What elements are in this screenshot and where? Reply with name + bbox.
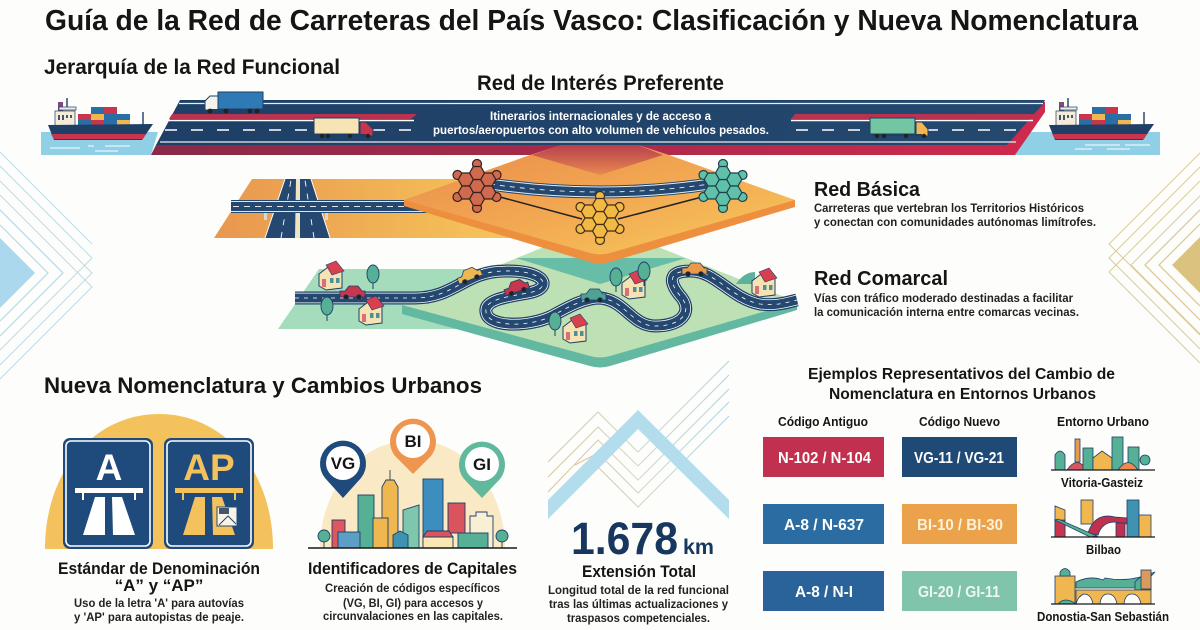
column headers: Código Antiguo [778, 414, 868, 429]
description: Longitud total de la red funcional [548, 585, 729, 597]
text block: red comarcal: Red Comarcal [814, 268, 948, 290]
ground line [308, 547, 517, 549]
label: Bilbao: Bilbao [1086, 543, 1121, 557]
sea right [1015, 132, 1160, 155]
panel: red comarcal illustration [278, 224, 797, 368]
ground line [1051, 469, 1155, 471]
beige half circle [320, 440, 505, 548]
caption [58, 559, 260, 624]
icon: ship right [1049, 98, 1154, 140]
label: Vitoria-Gasteiz: Vitoria-Gasteiz [1061, 476, 1143, 490]
shadow under orange [516, 258, 686, 284]
icon: mound [736, 272, 755, 284]
row 1 [763, 437, 1017, 477]
road surface [156, 100, 1045, 145]
icon: green truck [870, 118, 928, 138]
description: traspasos competenciales. [567, 613, 710, 625]
panel: red de interés preferente [41, 92, 1160, 155]
icon: skyline [318, 470, 508, 548]
row 2 [763, 504, 1017, 544]
icon: yellow node [576, 192, 624, 244]
overlap shade [532, 145, 663, 175]
icon: sign AP [164, 438, 254, 549]
description: tras las últimas actualizaciones y [549, 599, 729, 611]
heading: jerarquía: Jerarquía de la Red Funcional [44, 56, 340, 79]
title: Guía de la Red de Carreteras del País Vasco: Clasificación y Nueva Nomenclatura [45, 5, 1139, 37]
green diamond top [402, 224, 797, 358]
road crimson base [151, 102, 1045, 155]
decoration: left chevrons [0, 152, 92, 379]
panel: ejemplos [763, 366, 1169, 624]
text block: red básica: Red Básica [814, 179, 921, 201]
column headers: Código Nuevo [919, 414, 1000, 429]
column headers: Entorno Urbano [1057, 414, 1149, 429]
row 2: A-8 / N-637 [784, 517, 864, 534]
link road [490, 179, 710, 197]
heading: Ejemplos Representativos del Cambio de [808, 366, 1115, 383]
ground line [1051, 536, 1155, 538]
icon: highway [231, 179, 431, 238]
icon: Bilbao skyline [1055, 500, 1151, 537]
icon: Donostia skyline [1055, 568, 1155, 604]
heading [808, 366, 1115, 403]
caption: “A” y “AP” [115, 576, 203, 595]
green diamond side [402, 302, 797, 368]
orange strip [214, 179, 520, 238]
number: 1.678 [571, 513, 678, 564]
description [433, 111, 769, 137]
icon: pin BI [390, 419, 436, 474]
caption: Estándar de Denominación [58, 559, 260, 578]
icon: pin GI: GI [473, 455, 491, 474]
row 3: A-8 / N-I [795, 584, 853, 601]
panel: red básica illustration [214, 145, 795, 264]
caption: (VG, BI, GI) para accesos y [343, 598, 484, 610]
sea waves [50, 145, 1150, 151]
unit: km [683, 536, 714, 559]
description [548, 585, 729, 625]
heading: red de interés preferente: Red de Interés Preferente [477, 72, 724, 95]
icon: Vitoria skyline [1055, 437, 1150, 470]
icon: cars [340, 263, 707, 302]
sea left [41, 132, 158, 155]
description: puertos/aeropuertos con alto volumen de vehículos pesados. [433, 125, 769, 137]
row 1: N-102 / N-104 [778, 450, 871, 467]
decoration: right chevrons [1109, 153, 1200, 363]
text block: red básica: Carreteras que vertebran los Territorios Históricos [814, 203, 1084, 215]
caption: circunvalaciones en las capitales. [323, 611, 503, 623]
icon: ship left [48, 98, 153, 140]
icon: pin GI [459, 442, 505, 498]
text block: red básica: y conectan con comunidades autónomas limítrofes. [814, 217, 1096, 229]
icon: cream truck [314, 118, 373, 138]
label: Extensión Total [582, 562, 696, 581]
icon: houses [319, 261, 777, 343]
connector lines [500, 197, 702, 219]
caption: Uso de la letra 'A' para autovías [74, 598, 244, 610]
text block: red comarcal: Vías con tráfico moderado destinadas a facilitar [814, 293, 1074, 305]
icon: sign A [63, 438, 153, 549]
icon: pin BI: BI [404, 432, 422, 451]
panel: extensión total [548, 513, 729, 625]
description: Itinerarios internacionales y de acceso a [490, 111, 712, 123]
orange diamond top [404, 145, 795, 254]
panel: identificadores de capitales [308, 419, 517, 623]
caption: y 'AP' para autopistas de peaje. [74, 612, 244, 624]
text block: red comarcal: la comunicación interna entre comarcas vecinas. [814, 307, 1079, 319]
icon: blue truck [205, 92, 263, 113]
icon: pin VG [320, 441, 366, 498]
icon: trees [321, 262, 650, 336]
icon: red node [453, 160, 501, 212]
row 3: GI-20 / GI-11 [918, 584, 1000, 601]
row 1: VG-11 / VG-21 [914, 450, 1004, 467]
icon: teal node [699, 160, 747, 212]
caption: Identificadores de Capitales [308, 559, 517, 578]
icon: pin VG: VG [331, 454, 355, 473]
green strip [278, 269, 520, 329]
label: Donostia-San Sebastián: Donostia-San Sebastián [1037, 610, 1169, 624]
decoration: central chevron [548, 361, 729, 519]
orange diamond side [404, 200, 795, 264]
ground line [1051, 603, 1155, 605]
row 2: BI-10 / BI-30 [917, 517, 1003, 534]
column headers [778, 414, 1149, 429]
caption: Creación de códigos específicos [325, 583, 500, 595]
text block: red básica [814, 179, 1096, 229]
row 3 [763, 571, 1017, 611]
yellow half circle [45, 414, 273, 549]
icon: sign A: A [96, 447, 122, 488]
panel: estándar de denominación [45, 414, 273, 624]
heading: Nomenclatura en Entornos Urbanos [829, 386, 1096, 403]
caption [308, 559, 517, 623]
text block: red comarcal [814, 268, 1079, 319]
heading: nueva nomenclatura: Nueva Nomenclatura y Cambios Urbanos [44, 373, 482, 398]
winding road [295, 271, 797, 326]
icon: sign AP: AP [183, 447, 235, 488]
